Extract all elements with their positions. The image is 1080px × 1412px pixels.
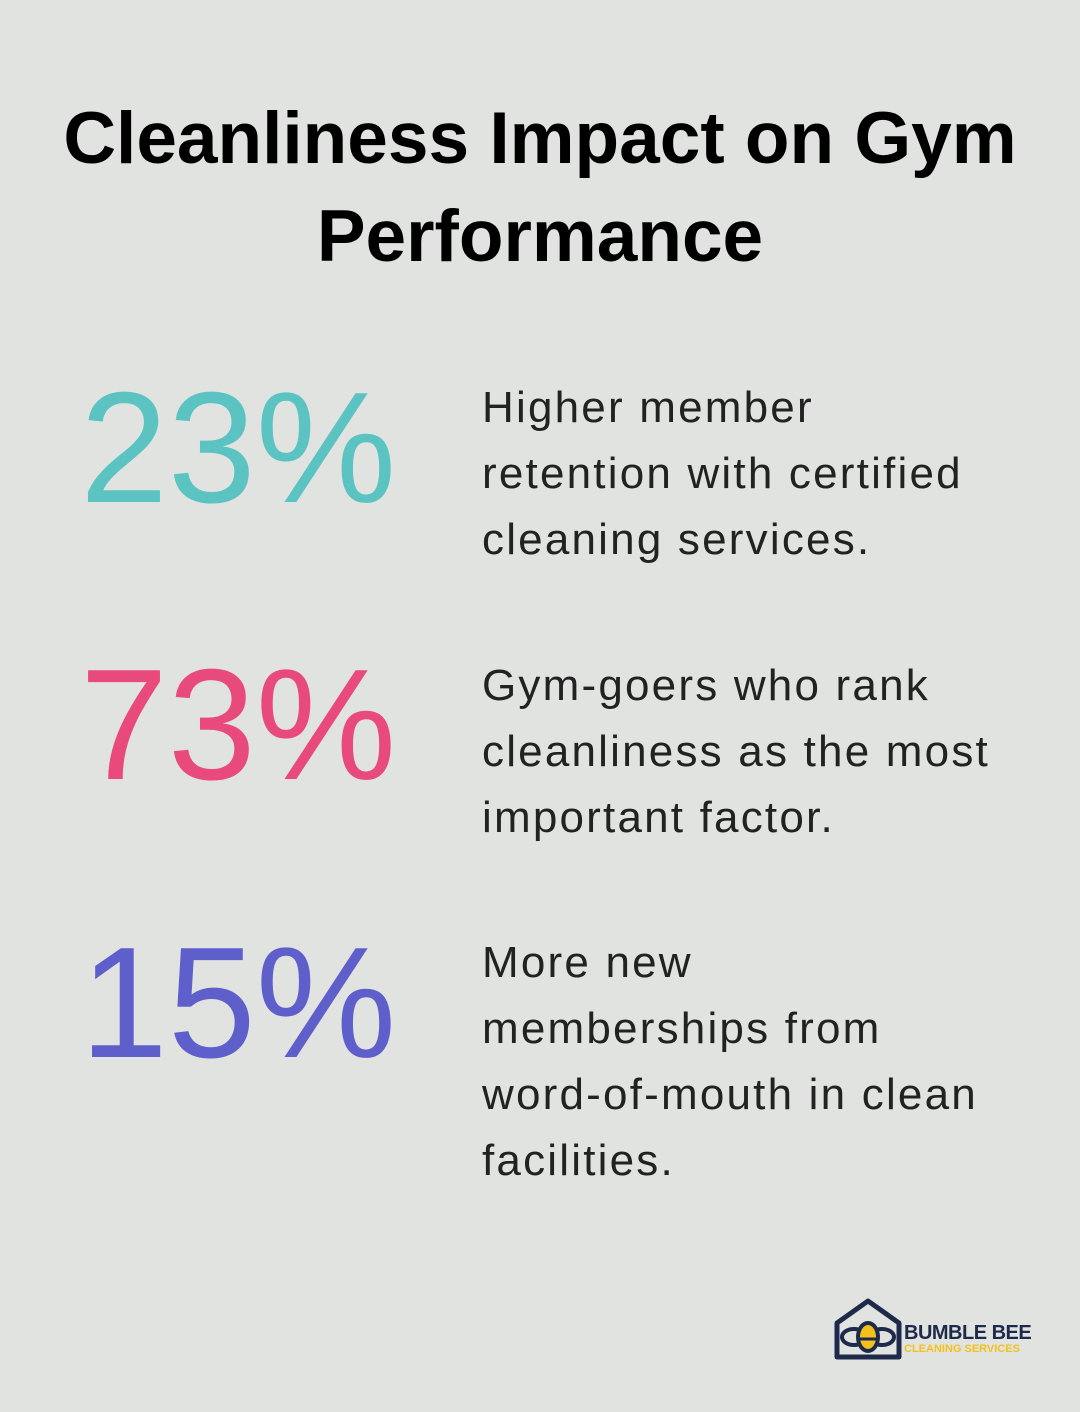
logo text: BUMBLE BEE bbox=[904, 1322, 1031, 1344]
title: Cleanliness Impact on Gym bbox=[63, 98, 1017, 179]
stat 3 text: memberships from bbox=[482, 1004, 882, 1053]
stat 3 text: More new bbox=[482, 938, 693, 987]
stat 2 text: cleanliness as the most bbox=[482, 727, 990, 776]
title bbox=[63, 98, 1017, 277]
logo bbox=[834, 1298, 1031, 1360]
title: Performance bbox=[317, 196, 763, 277]
stat 2 text: Gym-goers who rank bbox=[482, 661, 930, 710]
icon: bee house bbox=[834, 1298, 902, 1360]
stat 1 text: retention with certified bbox=[482, 449, 963, 498]
stat 1 text: cleaning services. bbox=[482, 515, 871, 564]
stat 2 text bbox=[482, 661, 990, 842]
stat 2 text: important factor. bbox=[482, 793, 835, 842]
stat 1 text: Higher member bbox=[482, 383, 814, 432]
stat 3 text: facilities. bbox=[482, 1136, 675, 1185]
stat 3 number: 15% bbox=[80, 915, 396, 1091]
stat 2 number: 73% bbox=[80, 637, 396, 813]
stat 1 text bbox=[482, 383, 963, 564]
stat 3 text: word-of-mouth in clean bbox=[482, 1070, 978, 1119]
logo: CLEANING SERVICES bbox=[904, 1343, 1020, 1355]
stat 1 number: 23% bbox=[80, 360, 396, 536]
stat 3 text bbox=[482, 938, 978, 1185]
